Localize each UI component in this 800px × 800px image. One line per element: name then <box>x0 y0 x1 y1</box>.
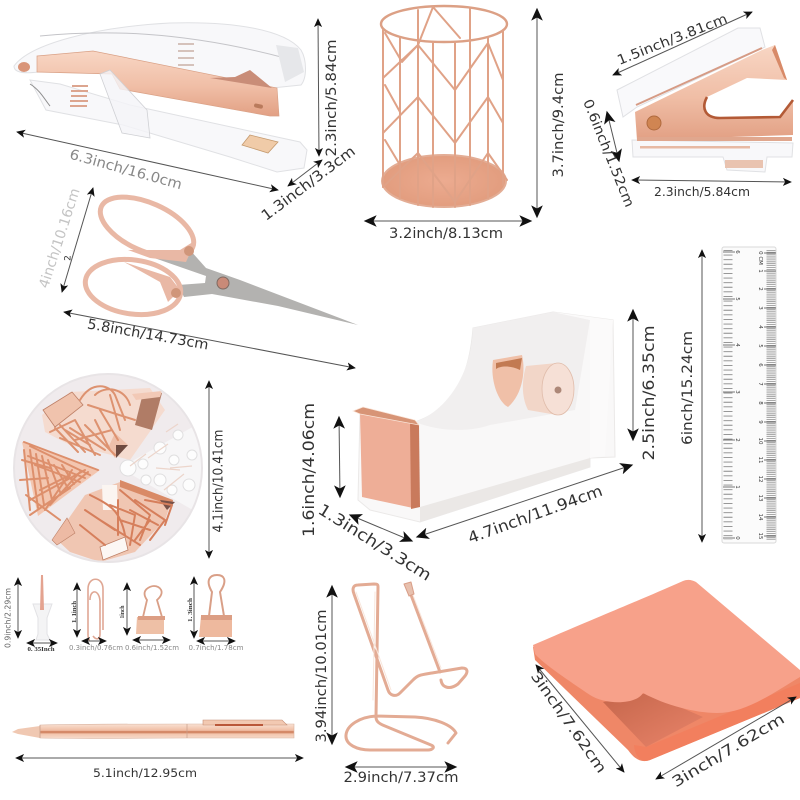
arrow: small clip height <box>126 583 128 635</box>
label: ruler centimetre scale: 3 <box>757 306 763 310</box>
icon: stapler springs <box>70 86 88 106</box>
label: ruler centimetre scale: 0 CM <box>757 251 763 265</box>
label: ruler centimetre scale: 13 <box>757 494 763 502</box>
arrow: dispenser front height <box>339 417 340 497</box>
icon: paper clips left <box>22 442 100 516</box>
label: large clip width: 0.7inch/1.78cm <box>188 643 244 652</box>
label: ruler inch scale: 0 <box>734 536 740 540</box>
arrow: dispenser width <box>350 515 412 541</box>
icon: wire pen holder <box>381 6 507 207</box>
arrow: dispenser height <box>632 310 634 440</box>
icon: large binder clip <box>199 575 232 637</box>
arrow: stapler length <box>17 132 278 190</box>
icon: organizer tray <box>14 374 210 562</box>
label: ruler inch scale: 4 <box>734 343 740 347</box>
label: ruler centimetre scale: 2 <box>757 287 763 291</box>
arrow: holder height <box>536 9 538 217</box>
label: remover length: 1.5inch/3.81cm <box>615 11 730 69</box>
label: pin height: 0.9inch/2.29cm <box>4 588 13 648</box>
panel: sticky notes <box>527 580 800 791</box>
label: ruler centimetre scale: 15 <box>757 532 763 540</box>
label: dispenser front height: 1.6inch/4.06cm <box>299 403 318 537</box>
panel: stapler <box>14 19 359 224</box>
label: stand height: 3.94inch/10.01cm <box>314 610 330 742</box>
label: notes depth: 3inch/7.62cm <box>527 669 609 776</box>
label: ruler centimetre scale: 14 <box>757 514 763 521</box>
label: remover height: 0.6inch/1.52cm <box>579 97 637 210</box>
panel: scissors <box>36 185 358 368</box>
icon: scissors handles <box>82 185 202 320</box>
panel: ruler <box>680 247 776 543</box>
label: stapler length: 6.3inch/16.0cm <box>68 147 184 193</box>
panel: pen <box>12 720 303 780</box>
icon: tape dispenser <box>353 312 615 522</box>
label: ruler centimetre scale: 8 <box>757 401 763 405</box>
label: stand width: 2.9inch/7.37cm <box>344 770 458 786</box>
label: scissors handle width: 4inch/10.16cm <box>36 186 84 290</box>
arrow: remover height <box>607 112 619 161</box>
label: holder height: 3.7inch/9.4cm <box>551 72 567 178</box>
arrow: small clip width <box>133 639 170 641</box>
arrow: scissors handle width <box>62 188 93 292</box>
icon: paper clip <box>88 579 103 640</box>
label: ruler inch scale: 1 <box>734 485 740 489</box>
label: remover width: 2.3inch/5.84cm <box>654 185 750 199</box>
icon: ruler <box>722 247 776 543</box>
label: ruler inch scale <box>734 250 740 540</box>
label: ruler centimetre scale: 5 <box>757 344 763 348</box>
label: ruler centimetre scale: 9 <box>757 420 763 424</box>
panel: phone stand <box>314 582 467 786</box>
arrow: paper clip width <box>82 640 106 642</box>
label: ruler length: 6inch/15.24cm <box>680 331 696 445</box>
label: scissors length: 5.8inch/14.73cm <box>86 316 210 354</box>
icon: clear push pins right <box>120 430 197 495</box>
icon: stapler <box>14 23 307 172</box>
panel: paper clip size <box>69 579 123 652</box>
label: ruler centimetre scale: 4 <box>757 325 763 329</box>
label: notes width: 3inch/7.62cm <box>669 710 788 791</box>
panel: round clip organizer <box>14 374 227 562</box>
label: pin width: 0. 35Inch <box>28 647 55 653</box>
label: holder width: 3.2inch/8.13cm <box>389 226 503 242</box>
icon: small binder clip <box>136 586 165 634</box>
panel: push pin size <box>4 575 57 653</box>
label: ruler centimetre scale: 1 <box>757 269 763 273</box>
label: ruler inch scale: 2 <box>734 438 740 442</box>
icon: sticky note pad <box>533 580 800 761</box>
icon: pen <box>12 720 294 738</box>
label: stapler depth: 1.3inch/3.3cm <box>259 144 359 224</box>
label: stapler height: 2.3inch/5.84cm <box>324 39 340 157</box>
arrow: paper clip height <box>76 583 78 637</box>
label: ruler centimetre scale: 12 <box>757 476 763 482</box>
arrow: stand width <box>346 766 456 768</box>
label: small clip width: 0.6inch/1.52cm <box>125 643 179 652</box>
label: paper clip height: 1. 1inch <box>72 600 78 623</box>
arrow: dispenser length <box>417 465 632 537</box>
panel: pen holder <box>365 6 567 242</box>
icon: scissors blades <box>137 250 358 325</box>
label: scissors small digit: 2 <box>63 255 73 261</box>
icon: push pin <box>33 575 52 640</box>
arrow: stapler depth <box>288 160 322 186</box>
label: ruler centimetre scale: 11 <box>757 456 763 464</box>
arrow: notes depth <box>536 665 624 772</box>
icon: binder clips top <box>42 388 165 460</box>
icon: staple remover <box>617 28 793 172</box>
label: dispenser width: 1.3inch/3.3cm <box>315 500 435 585</box>
icon: tape roller <box>492 355 523 407</box>
arrow: holder width <box>365 220 531 222</box>
label: paper clip width: 0.3inch/0.76cm <box>69 643 123 652</box>
arrow: remover width <box>632 180 791 182</box>
label: large clip height: 1. 3inch <box>188 597 194 622</box>
panel: tape dispenser <box>299 310 658 585</box>
label: ruler inch scale: 6 <box>734 250 740 254</box>
arrow: pen length <box>16 757 303 759</box>
arrow: stand height <box>331 586 333 744</box>
arrow: pin height <box>17 578 19 638</box>
label: ruler centimetre scale: 10 <box>757 438 763 445</box>
icon: rose gold cutter plate <box>360 413 413 508</box>
arrow: stapler height <box>318 19 319 156</box>
arrow: remover length <box>613 12 752 75</box>
panel: large binder clip size <box>188 575 244 652</box>
label: pen length: 5.1inch/12.95cm <box>93 766 197 780</box>
label: organizer diameter: 4.1inch/10.41cm <box>212 430 227 532</box>
arrow: ruler length <box>701 250 703 542</box>
arrow: large clip width <box>197 640 235 642</box>
arrow: organizer diameter <box>208 381 210 558</box>
label: small clip height: 1inch <box>120 605 126 618</box>
label: ruler inch scale: 5 <box>734 297 740 301</box>
label: dispenser height: 2.5inch/6.35cm <box>639 326 658 460</box>
arrow: large clip height <box>193 577 195 638</box>
label: ruler centimetre scale: 7 <box>757 382 763 386</box>
arrow: pin width <box>27 642 57 644</box>
label: ruler centimetre scale: 6 <box>757 363 763 367</box>
label: ruler centimetre scale <box>757 251 763 540</box>
arrow: scissors length <box>64 312 355 368</box>
label: ruler inch scale: 3 <box>734 390 740 394</box>
icon: binder clips bottom <box>55 482 172 562</box>
panel: staple remover <box>579 11 793 210</box>
label: dispenser length: 4.7inch/11.94cm <box>465 482 605 547</box>
icon: phone stand <box>346 582 467 750</box>
arrow: notes width <box>656 697 796 779</box>
panel: small binder clip size <box>120 583 179 652</box>
